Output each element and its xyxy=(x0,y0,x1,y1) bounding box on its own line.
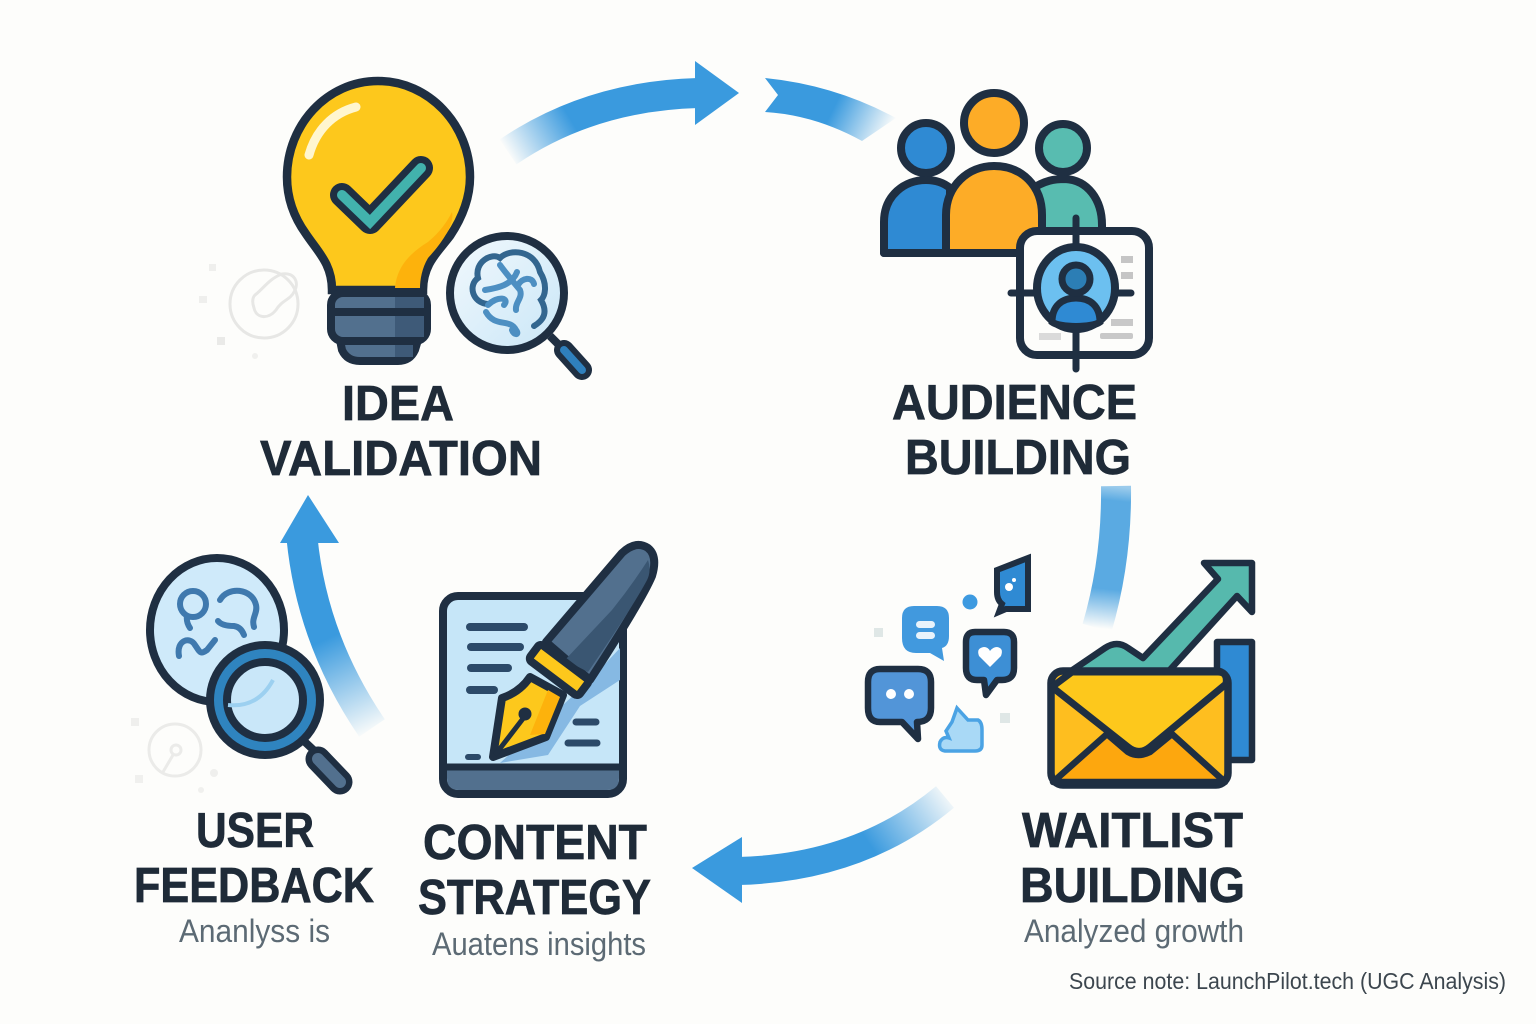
heading: waitlist building: WAITLIST xyxy=(1022,804,1243,858)
arrow: waitlist to content xyxy=(692,797,945,903)
ghost icon: faded circle near feedback xyxy=(131,718,218,793)
heading: waitlist building xyxy=(1020,804,1245,913)
icon: document with fountain pen xyxy=(443,545,654,794)
heading: idea validation: VALIDATION xyxy=(260,432,542,486)
icon: envelope with growth arrow and bar xyxy=(1051,563,1252,785)
heading: idea validation xyxy=(260,377,542,486)
subtext: feedback: Ananlyss is xyxy=(179,913,330,949)
icon: social bubbles xyxy=(868,558,1028,751)
subtext: content: Auatens insights xyxy=(432,926,646,962)
heading: content strategy: CONTENT xyxy=(423,816,647,870)
heading: audience building: AUDIENCE xyxy=(892,376,1137,430)
subtext: waitlist: Analyzed growth xyxy=(1024,913,1244,949)
icon: magnifier with brain xyxy=(450,236,582,370)
icon: audience group with target xyxy=(884,93,1149,369)
source note: Source note: LaunchPilot.tech (UGC Analysis) xyxy=(1069,968,1506,994)
arrow: feedback to validation xyxy=(280,495,372,728)
heading: user feedback: USER xyxy=(196,804,314,858)
heading: content strategy: STRATEGY xyxy=(418,871,651,925)
heading: idea validation: IDEA xyxy=(342,377,454,431)
heading: waitlist building: BUILDING xyxy=(1020,859,1245,913)
ghost icon: faded circle left of bulb xyxy=(199,264,298,359)
heading: user feedback: FEEDBACK xyxy=(134,859,374,913)
arrow: audience to waitlist xyxy=(1097,486,1116,628)
heading: content strategy xyxy=(418,816,651,925)
heading: audience building xyxy=(892,376,1137,485)
arrow: continuing to audience xyxy=(765,78,896,141)
heading: audience building: BUILDING xyxy=(905,431,1131,485)
icon: light bulb with check xyxy=(287,81,470,361)
arrow: validation to audience xyxy=(508,61,739,152)
heading: user feedback xyxy=(134,804,374,913)
icon: feedback magnifier xyxy=(150,558,340,782)
